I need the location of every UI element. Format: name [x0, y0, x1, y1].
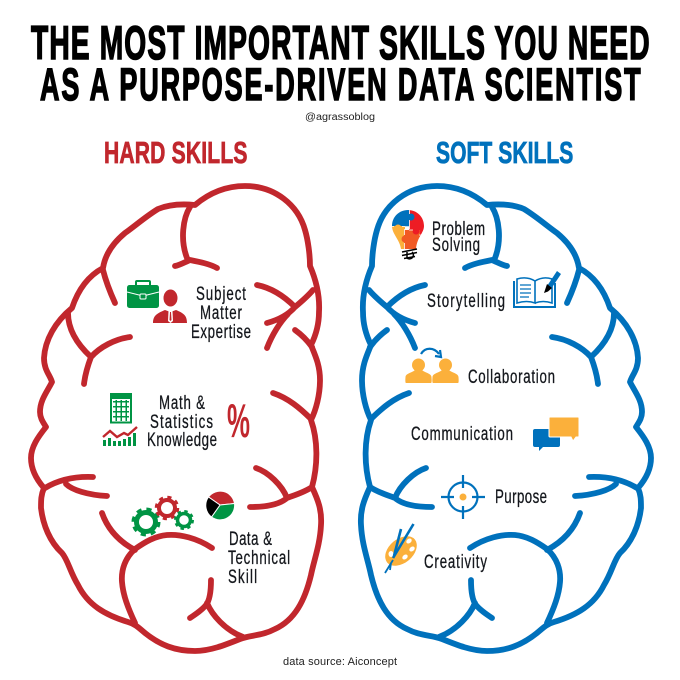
icon: briefcase [127, 281, 159, 308]
icon: gears [134, 498, 192, 534]
heading: hard skills: HARD SKILLS [104, 135, 247, 170]
label: subject matter expertise: Matter [200, 301, 242, 324]
icon: calculator [111, 394, 131, 422]
label: communication: Communication [411, 422, 513, 445]
label: subject matter expertise: Expertise [191, 320, 251, 343]
label: problem solving: Solving [432, 233, 480, 256]
icon: businessman [153, 290, 187, 323]
title: AS A PURPOSE-DRIVEN DATA SCIENTIST [40, 59, 641, 110]
icon: paint palette and brushes [379, 524, 423, 573]
label: math and statistics knowledge [147, 391, 217, 451]
label: data and technical skill: Technical [228, 546, 290, 569]
title [31, 18, 650, 110]
icon: open book and pen [514, 271, 561, 307]
heading: soft skills: SOFT SKILLS [436, 135, 573, 170]
icon: pie chart [206, 491, 235, 520]
title: THE MOST IMPORTANT SKILLS YOU NEED [31, 18, 650, 70]
label: creativity: Creativity [424, 550, 488, 573]
label: purpose: Purpose [495, 485, 547, 508]
label: math and statistics knowledge: Knowledge [147, 428, 217, 451]
icon: collaborating people [405, 349, 459, 383]
icon: target crosshair [441, 475, 485, 519]
label: subject matter expertise [191, 282, 251, 343]
label: math and statistics knowledge: Math & [159, 391, 205, 414]
data source note: data source: Aiconcept [283, 656, 397, 668]
label: subject matter expertise: Subject [196, 282, 246, 305]
label: problem solving [432, 217, 485, 256]
label: math and statistics knowledge: Statistics [150, 410, 213, 433]
left brain outline [31, 186, 321, 651]
label: collaboration: Collaboration [468, 365, 555, 388]
icon: speech bubbles [533, 417, 579, 451]
label: storytelling: Storytelling [427, 289, 505, 312]
icon: trend chart [103, 427, 137, 446]
right brain outline [361, 186, 651, 651]
label: data and technical skill [228, 527, 290, 588]
label: data and technical skill: Skill [228, 565, 257, 588]
icon: percent sign: % [227, 394, 250, 447]
icon: puzzle light bulb [392, 210, 424, 260]
label: data and technical skill: Data & [229, 527, 272, 550]
label: problem solving: Problem [432, 217, 485, 240]
author handle: @agrassoblog [305, 112, 375, 123]
